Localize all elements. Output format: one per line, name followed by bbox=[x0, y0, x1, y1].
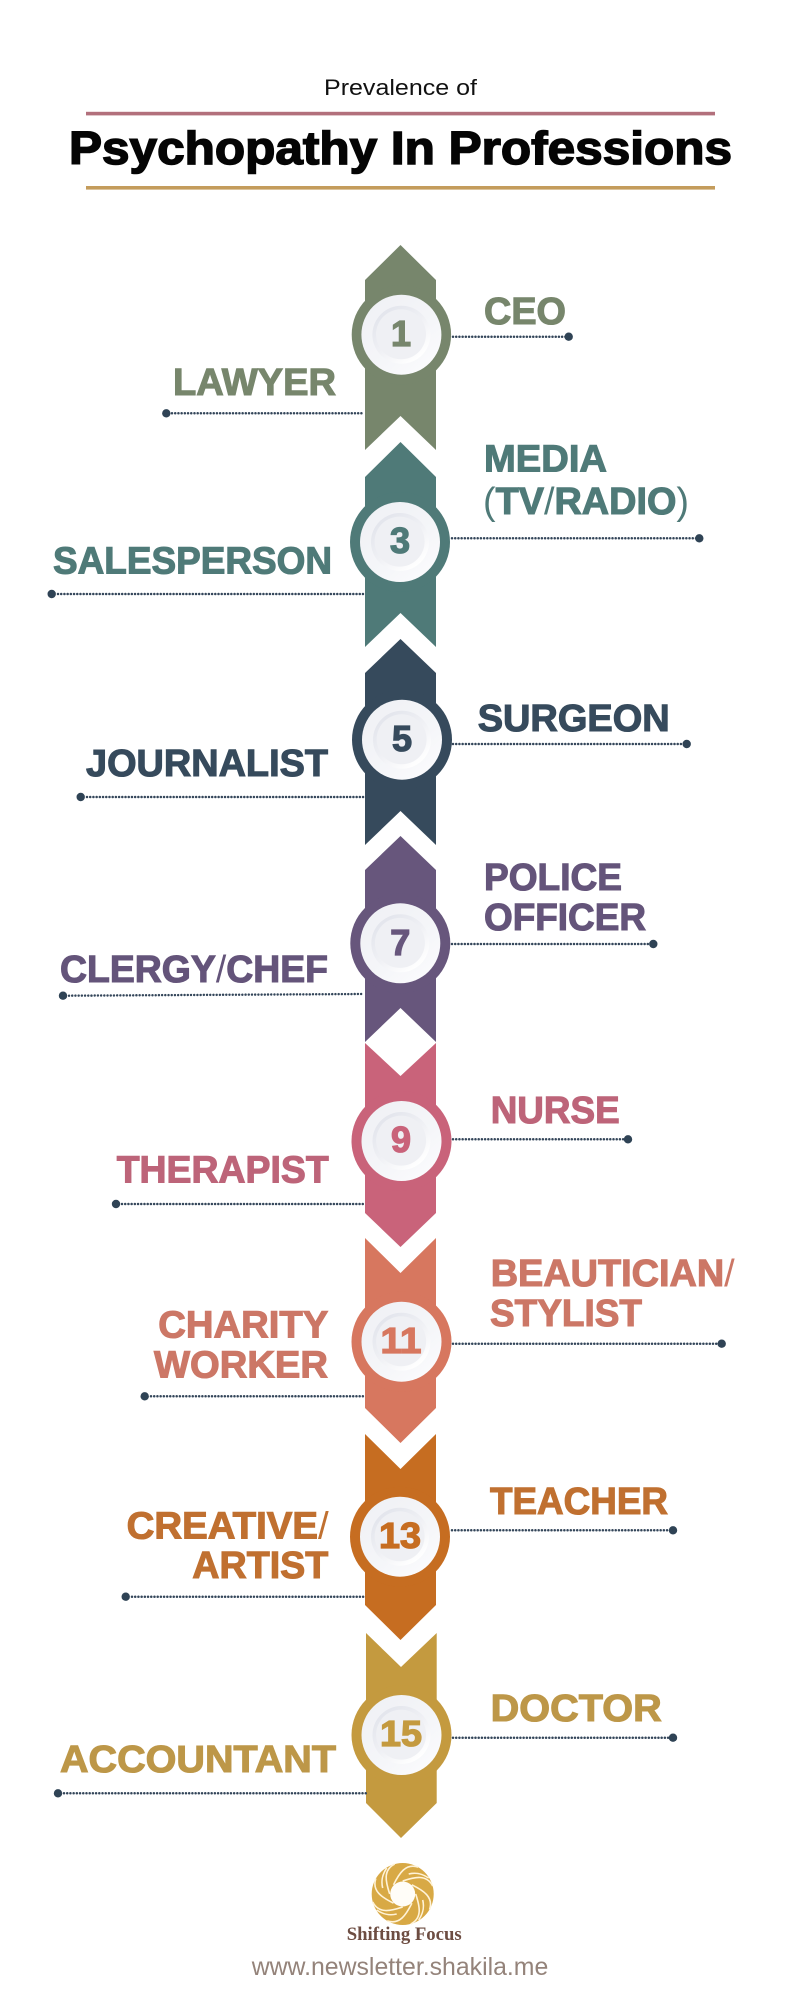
arrow segment 7 bbox=[365, 836, 436, 1042]
label: Creative/Artist: CREATIVE/ bbox=[127, 1505, 329, 1547]
icon: Shifting Focus swirl logo bbox=[370, 1861, 436, 1927]
label: Beautician/Stylist: BEAUTICIAN/ bbox=[491, 1253, 735, 1295]
arrow segment 5 bbox=[365, 639, 436, 845]
step 5: surgeon and journalist bbox=[76, 639, 691, 845]
leader: Clergy/Chef bbox=[59, 992, 364, 1000]
label: Journalist: JOURNALIST bbox=[86, 743, 328, 785]
label: Police officer: POLICE bbox=[484, 857, 622, 899]
badge 15 bbox=[352, 1685, 452, 1785]
leader: Journalist bbox=[76, 793, 364, 801]
leader: Therapist bbox=[112, 1200, 364, 1208]
label: Creative/Artist bbox=[127, 1505, 329, 1587]
badge 13 bbox=[350, 1487, 450, 1587]
label: Police officer: OFFICER bbox=[484, 897, 646, 939]
label: Charity worker: WORKER bbox=[154, 1345, 328, 1387]
badge 15: 15 bbox=[380, 1713, 422, 1754]
badge 5 bbox=[352, 690, 452, 790]
arrow segment 15 bbox=[366, 1633, 437, 1838]
step 3: media and salesperson bbox=[48, 439, 704, 647]
leader: Charity worker bbox=[140, 1392, 364, 1401]
bottom rule bbox=[86, 186, 715, 190]
badge 7: 7 bbox=[390, 922, 410, 963]
badge 11: 11 bbox=[380, 1320, 422, 1361]
arrow segment 3 bbox=[365, 442, 436, 647]
label: Charity worker: CHARITY bbox=[158, 1305, 328, 1347]
leader: Creative/Artist bbox=[122, 1592, 365, 1601]
label: Creative/Artist: ARTIST bbox=[192, 1545, 328, 1587]
leader: CEO bbox=[453, 332, 573, 341]
header bbox=[69, 75, 732, 190]
arrow segment 11 bbox=[365, 1238, 436, 1443]
website url: www.newsletter.shakila.me bbox=[251, 1953, 548, 1981]
arrow segment 1 bbox=[365, 245, 436, 450]
badge 5: 5 bbox=[392, 718, 412, 759]
leader: Surgeon bbox=[453, 740, 691, 748]
leader: Teacher bbox=[452, 1526, 677, 1535]
label: Media (TV/Radio): MEDIA bbox=[484, 439, 607, 481]
leader: Police officer bbox=[452, 940, 658, 948]
footer bbox=[251, 1861, 548, 1981]
badge 3: 3 bbox=[390, 520, 410, 561]
label: Beautician/Stylist bbox=[490, 1253, 735, 1335]
brand name: Shifting Focus bbox=[347, 1924, 462, 1945]
badge 1 bbox=[352, 285, 451, 384]
badge 9 bbox=[352, 1091, 452, 1191]
title: Psychopathy In Professions bbox=[69, 122, 732, 174]
step 13: teacher and creative/artist bbox=[122, 1434, 677, 1640]
label: Therapist: THERAPIST bbox=[117, 1150, 329, 1192]
badge 11 bbox=[352, 1292, 452, 1392]
arrow segment 9 bbox=[365, 1043, 436, 1247]
label: Lawyer: LAWYER bbox=[173, 362, 336, 404]
leader: Beautician/Stylist bbox=[453, 1340, 726, 1348]
top rule bbox=[86, 112, 715, 115]
label: Surgeon: SURGEON bbox=[478, 698, 670, 740]
leader: Lawyer bbox=[162, 409, 364, 417]
label: Media (TV/Radio) bbox=[483, 439, 689, 523]
label: Doctor: DOCTOR bbox=[491, 1688, 662, 1730]
label: Accountant: ACCOUNTANT bbox=[60, 1739, 336, 1781]
label: Beautician/Stylist: STYLIST bbox=[490, 1293, 642, 1335]
badge 1: 1 bbox=[391, 313, 411, 354]
label: Media (TV/Radio): (TV/RADIO) bbox=[483, 481, 689, 523]
badge 13: 13 bbox=[379, 1515, 421, 1556]
step 9: nurse and therapist bbox=[112, 1043, 632, 1247]
label: Clergy/Chef: CLERGY/CHEF bbox=[60, 949, 328, 991]
leader: Media bbox=[452, 534, 704, 542]
step 1: CEO and lawyer bbox=[162, 245, 573, 450]
step 7: police officer and clergy/chef bbox=[59, 836, 658, 1042]
badge 7 bbox=[350, 893, 450, 993]
label: Nurse: NURSE bbox=[491, 1090, 620, 1132]
leader: Accountant bbox=[54, 1789, 366, 1798]
step 11: beautician/stylist and charity worker bbox=[140, 1238, 735, 1443]
badge 9: 9 bbox=[391, 1119, 411, 1160]
arrow segment 13 bbox=[365, 1434, 436, 1640]
label: Teacher: TEACHER bbox=[490, 1481, 668, 1523]
step 15: doctor and accountant bbox=[54, 1633, 677, 1838]
label: Salesperson: SALESPERSON bbox=[53, 540, 332, 582]
label: Charity worker bbox=[154, 1305, 328, 1387]
subtitle: Prevalence of bbox=[324, 75, 478, 100]
leader: Nurse bbox=[453, 1135, 632, 1144]
label: Police officer bbox=[484, 857, 646, 939]
label: CEO: CEO bbox=[484, 291, 566, 333]
leader: Salesperson bbox=[48, 590, 364, 598]
badge 3 bbox=[350, 492, 450, 592]
leader: Doctor bbox=[453, 1734, 677, 1742]
